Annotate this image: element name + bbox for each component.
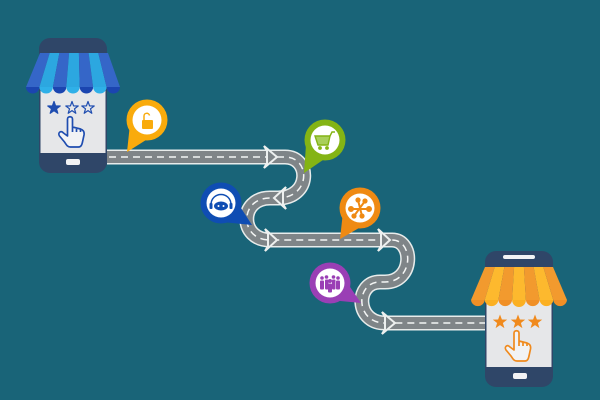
icon: speaker slot — [503, 255, 535, 259]
icon: star rating one of three — [48, 102, 94, 113]
icon: blue pointing hand — [59, 117, 84, 147]
icon: group of people — [320, 275, 340, 292]
pin: shopping cart, green — [304, 120, 346, 173]
pin: network, orange — [340, 188, 380, 239]
icon: connected nodes — [349, 198, 371, 218]
right phone: three star rating — [471, 251, 567, 387]
road path — [107, 157, 485, 323]
icon: orange pointing hand — [505, 331, 531, 361]
pin: crowd of people, purple — [310, 262, 361, 304]
icon: home button — [66, 159, 80, 165]
icon: blue striped awning — [26, 53, 120, 94]
icon: open padlock — [142, 113, 153, 129]
left phone: one star rating — [26, 38, 120, 173]
pin: unlock, yellow — [126, 100, 168, 152]
pin: customer support headset, blue — [200, 182, 252, 225]
icon: shopping cart — [315, 132, 335, 149]
icon: headset agent — [210, 194, 232, 210]
icon: star rating three of three — [493, 314, 542, 328]
road arrowheads — [264, 146, 395, 334]
icon: orange striped awning — [471, 267, 567, 307]
icon: home button — [513, 373, 527, 379]
